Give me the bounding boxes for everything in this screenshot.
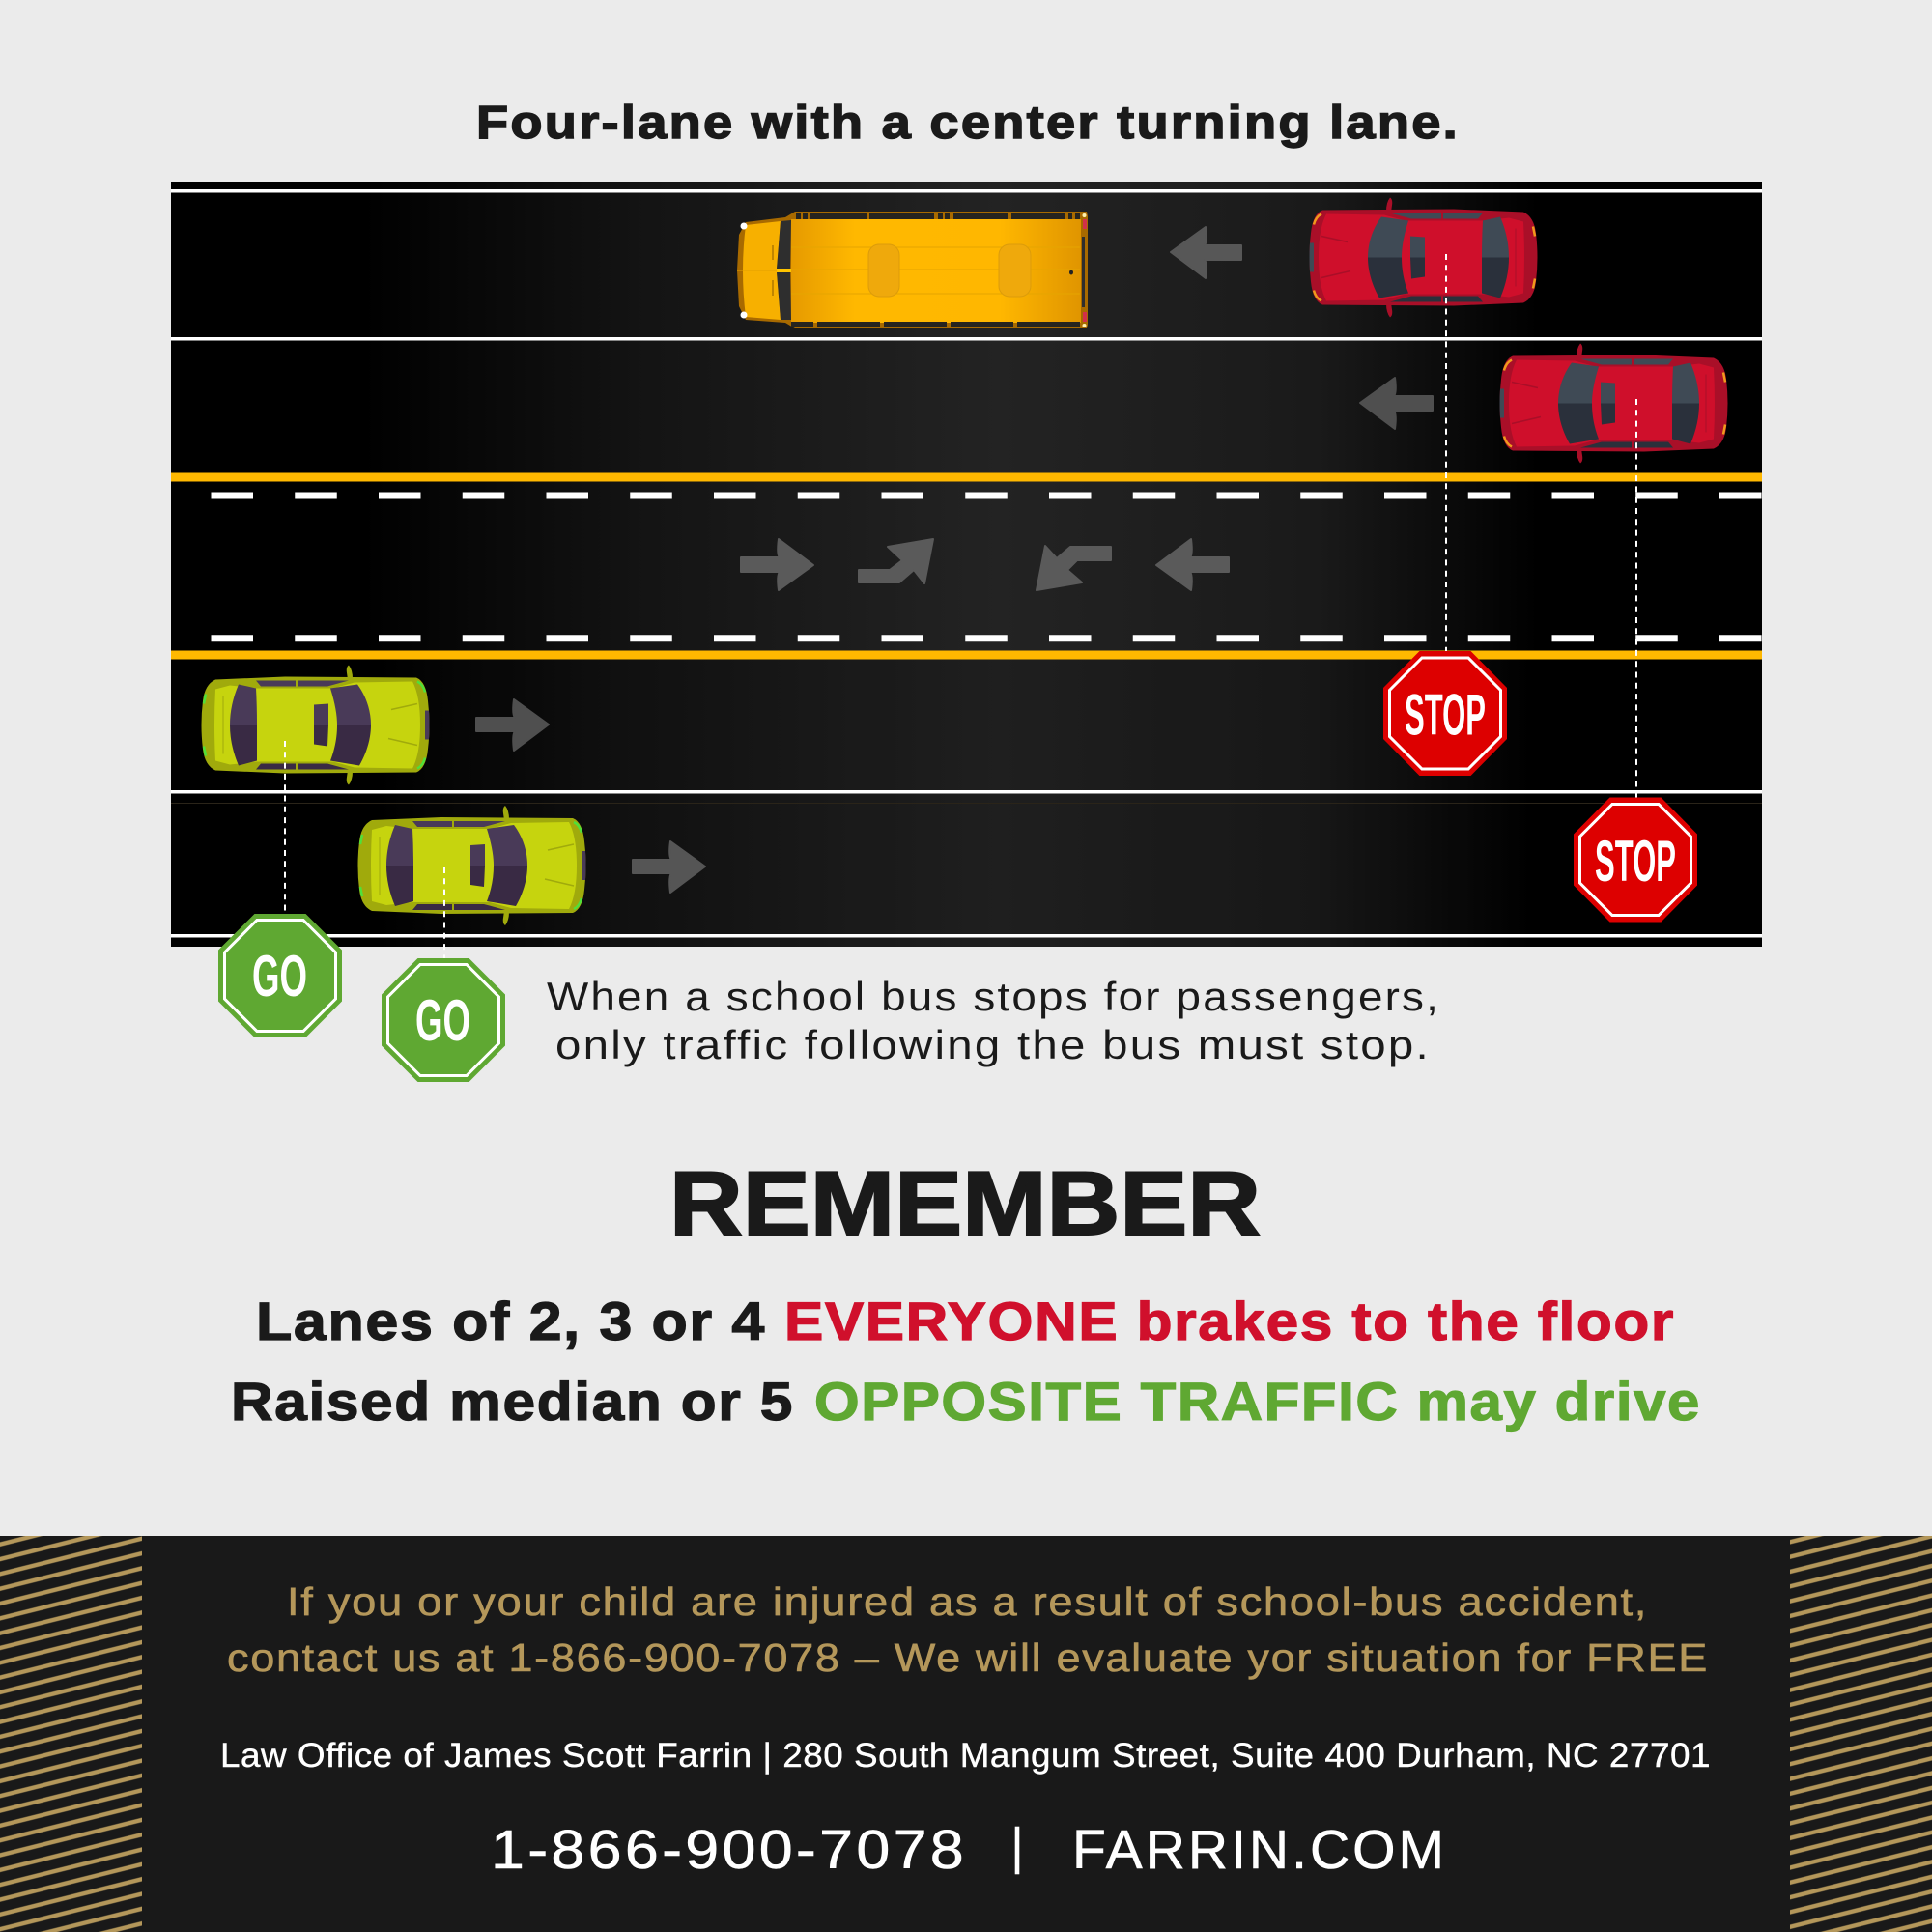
stop sign 2: STOP	[1595, 829, 1676, 894]
rule: raised median or 5: OPPOSITE TRAFFIC may drive	[814, 1371, 1701, 1432]
rule: raised median or 5: Raised median or 5	[231, 1371, 794, 1432]
rule: lanes of 2, 3 or 4: EVERYONE brakes to the floor	[784, 1291, 1675, 1351]
caption: only traffic following the bus must stop.	[555, 1022, 1431, 1067]
go sign 1: GO	[252, 944, 307, 1009]
red car: lane 2	[1499, 344, 1727, 464]
arrow: center lane turn up-right	[859, 539, 933, 583]
footer call to action	[227, 1579, 1709, 1680]
rule: lanes of 2, 3 or 4: Lanes of 2, 3 or 4	[256, 1291, 766, 1351]
arrow: center lane right	[741, 539, 813, 590]
green car: lane 4	[201, 665, 429, 784]
go sign 2: GO	[415, 988, 470, 1053]
dotted connector: green car 2 to go sign	[443, 867, 445, 958]
go sign 2	[382, 958, 505, 1082]
dotted connector: green car 1 to go sign	[284, 741, 286, 914]
footer call to action: contact us at 1-866-900-7078 – We will evaluate yor situation for FREE	[227, 1635, 1709, 1680]
stop sign 1	[1383, 651, 1507, 776]
red car: lane 1	[1310, 197, 1538, 317]
rule: raised median or 5	[231, 1371, 1701, 1432]
road diagram	[171, 182, 1762, 947]
arrow: center lane left	[1156, 539, 1229, 590]
arrow: lane 1 left	[1171, 227, 1241, 278]
caption: When a school bus stops for passengers,	[547, 974, 1440, 1019]
arrow: center lane turn down-left	[1037, 546, 1111, 590]
arrow: lane 5 right	[633, 841, 705, 893]
footer contact line: 1-866-900-7078	[491, 1819, 967, 1881]
dotted connector: red car 2 to stop sign	[1635, 399, 1637, 798]
dotted connector: red car 1 to stop sign	[1445, 254, 1447, 651]
school bus	[737, 212, 1088, 328]
heading: remember: REMEMBER	[669, 1152, 1261, 1254]
arrow: lane 4 right	[476, 699, 549, 751]
rule: lanes of 2, 3 or 4	[256, 1291, 1675, 1351]
stop sign 1: STOP	[1405, 682, 1486, 748]
footer address: Law Office of James Scott Farrin | 280 South Mangum Street, Suite 400 Durham, NC 27701	[220, 1737, 1711, 1775]
footer call to action: If you or your child are injured as a result of school-bus accident,	[287, 1579, 1648, 1624]
go sign 1	[218, 914, 342, 1037]
footer panel	[0, 1536, 1932, 1932]
title: Four-lane with a center turning lane.	[476, 98, 1460, 149]
stop sign 2	[1574, 798, 1697, 922]
footer contact line: FARRIN.COM	[1072, 1819, 1447, 1881]
arrow: lane 2 left	[1360, 378, 1433, 429]
caption	[547, 974, 1440, 1067]
footer contact line	[491, 1819, 1447, 1881]
green car: lane 5	[357, 806, 585, 925]
